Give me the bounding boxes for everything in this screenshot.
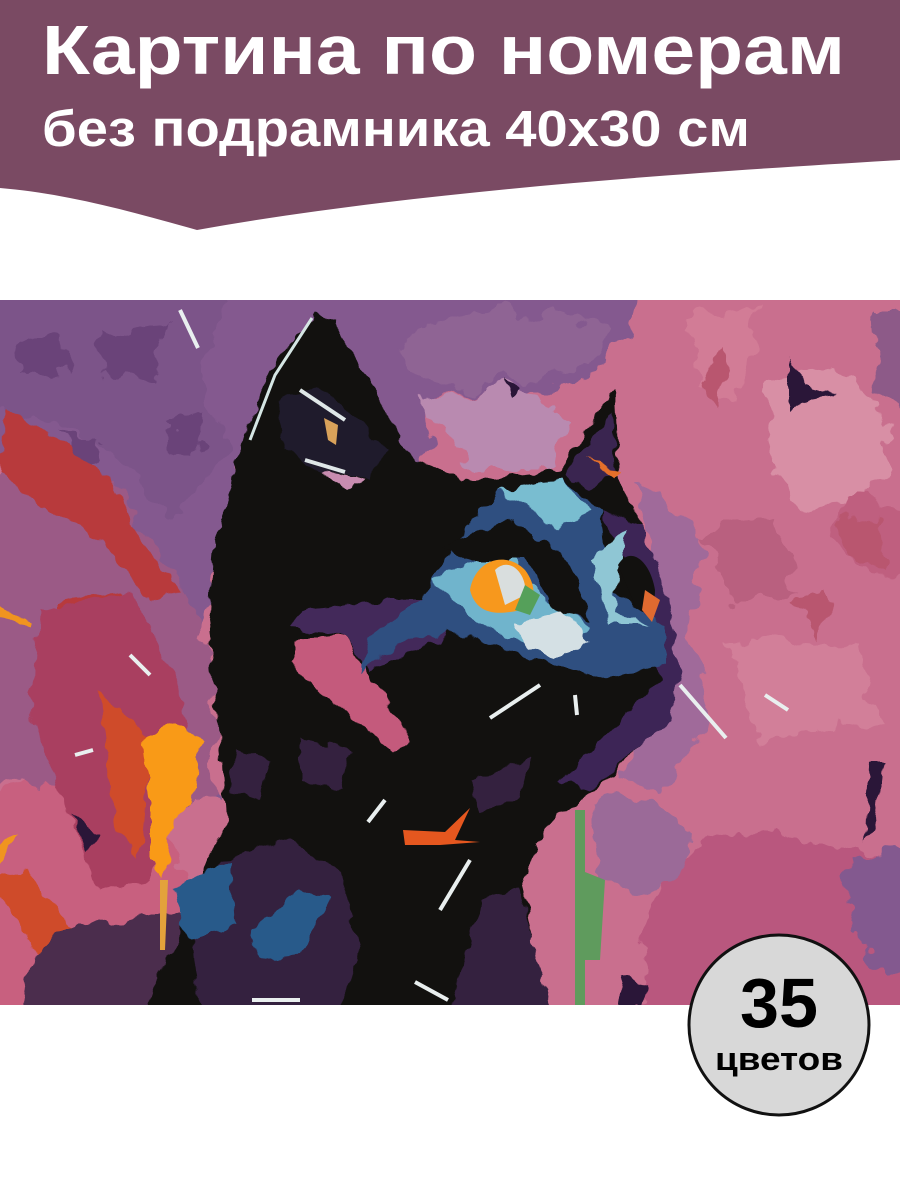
white whiskers and splatters [75,310,788,1000]
left ear highlights [275,385,390,480]
painting background [0,260,900,1045]
right ear colours [565,410,615,490]
red paint splash [0,405,220,1010]
side drips [575,810,605,1005]
header banner [0,0,900,230]
cat chest blue patches [170,860,330,960]
orange paint splash [142,720,200,880]
badge: 35 colours: 35 [740,964,818,1042]
cat eyes [470,556,660,622]
dark lower left corner [20,913,220,1010]
cat [145,313,680,1010]
badge: 35 colours [689,935,869,1115]
cat silhouette [145,313,668,1010]
badge: 35 colours: цветов [715,1041,843,1077]
orange bow mark [403,808,480,845]
cat fur purple shadows [190,740,550,1010]
painting: black cat with paint splashes [0,260,900,1045]
title: Картина по номерам [42,11,845,89]
left ear edge [250,318,312,440]
cat face blue fur [360,480,665,680]
ear whisker marks [300,390,345,472]
subtitle: без подрамника 40х30 см [42,100,750,157]
black spots [70,358,885,1005]
ear orange mark [324,418,338,445]
